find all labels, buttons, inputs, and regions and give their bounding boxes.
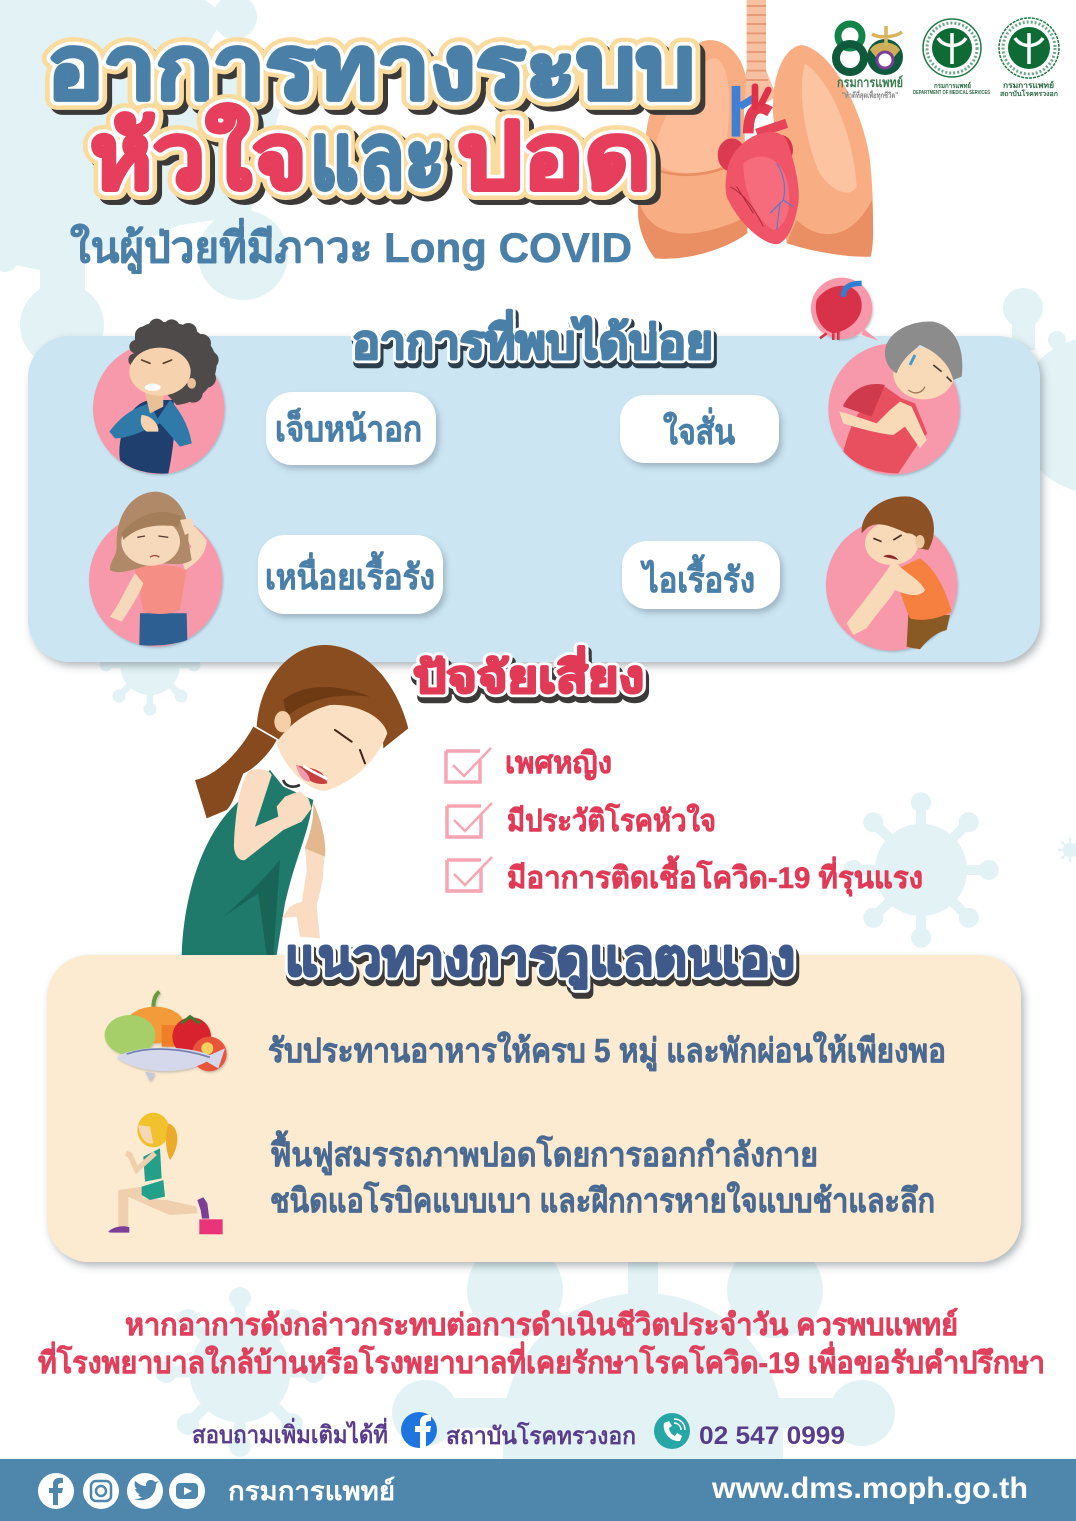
logo: 80 years: "ทำดีที่สุดเพื่อทุกชีวิต" [842, 89, 898, 101]
contact label: สอบถามเพิ่มเติมได้ที่ [192, 1417, 388, 1449]
icon: facebook [401, 1412, 437, 1448]
risk item: female: เพศหญิง [505, 747, 612, 781]
symptom: palpitations [620, 322, 962, 475]
list: risk factors [446, 747, 923, 897]
panel: self care [47, 930, 1021, 1262]
heading: common symptoms: อาการที่พบได้บ่อย [352, 310, 713, 368]
text: nutrition and rest: รับประทานอาหารให้ครบ 5 หมู่ และพักผ่อนให้เพียงพอ [268, 1031, 946, 1072]
symptom: chest pain [93, 319, 436, 474]
heading: risk factors: ปัจจัยเสี่ยง [413, 646, 644, 702]
trachea [740, 0, 777, 110]
heading: self care: แนวทางการดูแลตนเอง [285, 930, 795, 989]
symptom: chronic cough [622, 496, 957, 651]
warning message: ที่โรงพยาบาลใกล้บ้านหรือโรงพยาบาลที่เคยรักษาโรคโควิด-19 เพื่อขอรับคำปรึกษา [38, 1341, 1045, 1380]
title line 2: ปอด [457, 106, 651, 208]
symptom: chronic fatigue [89, 492, 443, 647]
title line 2: หัวใจ [95, 109, 312, 213]
left lung [638, 40, 747, 259]
footer background [0, 1459, 1076, 1521]
facebook page name: สถาบันโรคทรวงอก [446, 1421, 636, 1450]
heading: risk factors: ปัจจัยเสี่ยง [413, 646, 644, 702]
logo: department of medical services: DEPARTMENT OF MEDICAL SERVICES [913, 90, 991, 96]
title line 1: อาการทางระบบ [47, 18, 695, 117]
panel background [28, 336, 1040, 662]
contact row [192, 1412, 845, 1450]
heading: risk factors [413, 646, 646, 707]
heading: self care: แนวทางการดูแลตนเอง [287, 935, 797, 994]
logo: department of medical services: กรมการแพทย์ [934, 81, 971, 90]
panel: common symptoms [28, 278, 1040, 662]
warning message: หากอาการดังกล่าวกระทบต่อการดำเนินชีวิตประจำวัน ควรพบแพทย์ [125, 1308, 958, 1342]
social icons [38, 1473, 205, 1509]
logos [836, 18, 1059, 101]
pill: chest pain [266, 392, 436, 465]
panel background [47, 955, 1021, 1262]
footer bar [0, 1459, 1076, 1521]
pill: palpitations [620, 395, 779, 463]
title line 1: อาการทางระบบ [47, 18, 695, 117]
heading: risk factors: ปัจจัยเสี่ยง [415, 651, 646, 707]
heading: common symptoms: อาการที่พบได้บ่อย [354, 314, 715, 372]
subtitle: ในผู้ป่วยที่มีภาวะ Long COVID [70, 218, 632, 274]
illustration: coughing person [826, 496, 957, 651]
logo: department of medical services [913, 19, 991, 96]
title line 2: ปอด [457, 106, 651, 208]
illustration: woman holding chest [182, 645, 408, 955]
right lung [773, 45, 873, 257]
website: www.dms.moph.go.th [711, 1472, 1028, 1505]
header illustration: lungs and heart [638, 0, 873, 259]
text: lung rehabilitation [270, 1130, 935, 1219]
pill: chronic fatigue [258, 535, 443, 614]
pill: chronic cough [622, 541, 780, 609]
curly hair [128, 319, 219, 405]
title line 1: อาการทางระบบ [47, 18, 695, 117]
icon: food [105, 992, 227, 1082]
title line 2: ปอด [457, 106, 651, 208]
risk item: severe covid [447, 855, 923, 897]
text: lung rehabilitation: ชนิดแอโรบิคแบบเบา และฝึกการหายใจแบบช้าและลึก [270, 1181, 935, 1219]
icon: phone [654, 1413, 690, 1449]
icon: exercising woman [108, 1113, 223, 1234]
heart [718, 86, 799, 244]
risk item: heart disease history: มีประวัติโรคหัวใจ [507, 802, 716, 838]
risk item: heart disease history [447, 802, 716, 838]
title line 2: และ [310, 106, 445, 208]
pill: chronic fatigue: เหนื่อยเรื้อรัง [265, 551, 435, 597]
title line 2: และ [310, 106, 445, 208]
pill: chronic cough: ไอเรื้อรัง [639, 554, 755, 600]
logo: 80 years [836, 24, 903, 101]
title line 2: และ [310, 106, 445, 208]
footer name: กรมการแพทย์ [228, 1476, 395, 1506]
title line 2: และ [315, 111, 450, 213]
pill: palpitations: ใจสั่น [663, 407, 735, 452]
pill: chest pain: เจ็บหน้าอก [275, 407, 422, 449]
logo: central chest institute: กรมการแพทย์ [1003, 80, 1054, 90]
title line 1: อาการทางระบบ [52, 23, 700, 122]
text: lung rehabilitation: ฟื้นฟูสมรรถภาพปอดโดยการออกกำลังกาย [270, 1130, 818, 1176]
title line 2: ปอด [462, 111, 656, 213]
warning message [38, 1308, 1045, 1380]
title line 2: หัวใจ [90, 104, 307, 208]
illustration: tired girl [89, 492, 222, 647]
title line 2 [90, 104, 656, 213]
logo: central chest institute: สถาบันโรคทรวงอก [1000, 89, 1058, 98]
main title [47, 18, 700, 213]
heading: common symptoms: อาการที่พบได้บ่อย [352, 310, 713, 368]
illustration: elderly person [828, 322, 962, 475]
phone number: 02 547 0999 [699, 1422, 845, 1450]
risk item: severe covid: มีอาการติดเชื้อโควิด-19 ที่รุนแรง [507, 855, 923, 897]
illustration: person with chest pain [93, 319, 224, 474]
title line 2: หัวใจ [90, 104, 307, 208]
title line 2: หัวใจ [90, 104, 307, 208]
heading: self care: แนวทางการดูแลตนเอง [285, 930, 795, 989]
logo: central chest institute [999, 18, 1059, 98]
icon: heart callout [811, 278, 878, 341]
logo: 80 years: กรมการแพทย์ [837, 75, 903, 90]
risk item: female [446, 747, 612, 782]
